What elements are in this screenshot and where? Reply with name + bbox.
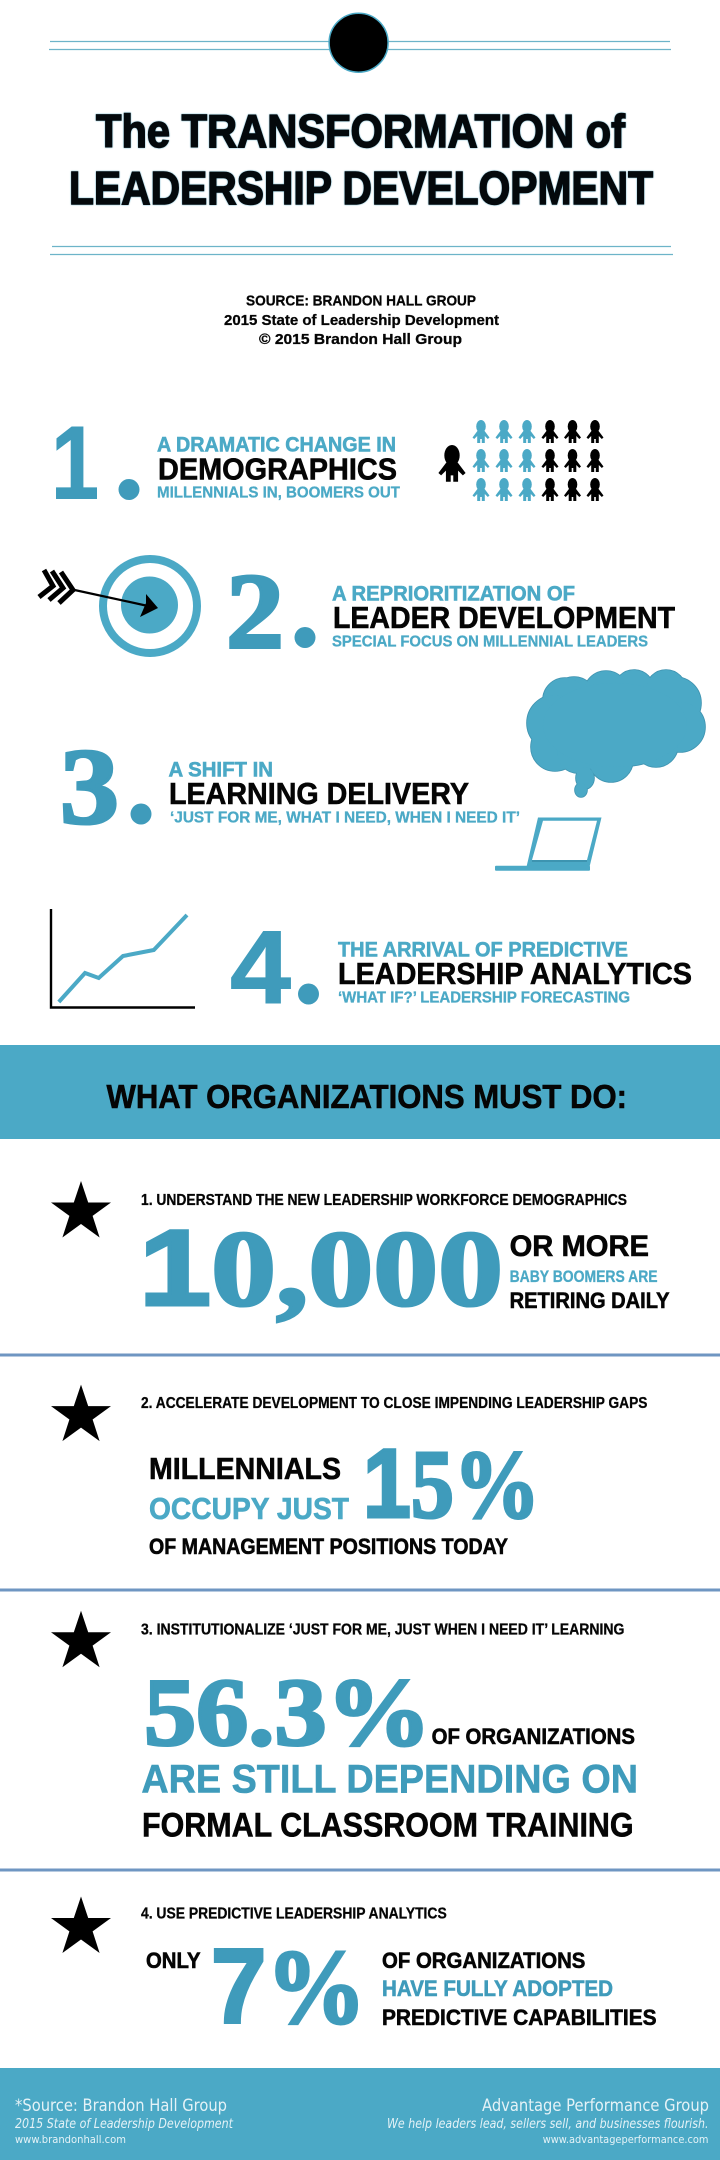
number 4	[230, 910, 319, 1026]
stat caption: PREDICTIVE CAPABILITIES	[382, 2005, 657, 2030]
trend 1 text: MILLENNIALS IN, BOOMERS OUT	[157, 485, 401, 502]
panel: action 1	[51, 1181, 670, 1329]
stat: 7%: 7%	[211, 1928, 366, 2046]
action 1 heading: 1. UNDERSTAND THE NEW LEADERSHIP WORKFORCE DEMOGRAPHICS	[141, 1192, 627, 1209]
trend 3 text: LEARNING DELIVERY	[169, 776, 469, 811]
icon: people grid	[438, 420, 604, 501]
title: LEADERSHIP DEVELOPMENT	[69, 162, 653, 214]
stat caption: RETIRING DAILY	[510, 1288, 670, 1313]
stat caption: ARE STILL DEPENDING ON	[141, 1758, 638, 1802]
stat caption: OF ORGANIZATIONS	[382, 1948, 585, 1973]
footer source credit: www.brandonhall.com	[15, 2133, 126, 2146]
source block: © 2015 Brandon Hall Group	[259, 331, 462, 348]
number 1: 1	[51, 406, 99, 522]
footer source credit: *Source: Brandon Hall Group	[15, 2096, 227, 2116]
panel: action 4	[51, 1896, 657, 2046]
trend 2 text: LEADER DEVELOPMENT	[333, 600, 675, 635]
footer source credit	[15, 2096, 234, 2146]
stat caption: OF ORGANIZATIONS	[432, 1724, 635, 1749]
stat: 10,000: 10,000	[139, 1207, 503, 1329]
trend 4 text	[338, 939, 692, 1007]
icon: line chart	[51, 909, 195, 1008]
trend 2 text: SPECIAL FOCUS ON MILLENNIAL LEADERS	[332, 634, 648, 651]
stat caption: HAVE FULLY ADOPTED	[382, 1976, 613, 2001]
number 2: 2	[226, 553, 284, 672]
trend 1: demographics	[51, 406, 604, 522]
trend 4: predictive analytics	[51, 909, 692, 1026]
stat: 56.3%: 56.3%	[144, 1658, 431, 1766]
icon: star	[51, 1611, 111, 1667]
icon: target and arrow	[39, 559, 197, 653]
trend 2 text: A REPRIORITIZATION OF	[332, 583, 575, 606]
trend 4 text: ‘WHAT IF?’ LEADERSHIP FORECASTING	[338, 990, 630, 1007]
number 4: 4	[230, 910, 291, 1026]
stat caption	[382, 1948, 657, 2030]
stat caption: BABY BOOMERS ARE	[510, 1268, 658, 1286]
stat caption left	[149, 1451, 349, 1526]
icon: star	[51, 1896, 111, 1953]
action 2 heading: 2. ACCELERATE DEVELOPMENT TO CLOSE IMPENDING LEADERSHIP GAPS	[141, 1395, 647, 1412]
icon: star	[51, 1385, 111, 1441]
header ornament: lines and circle	[49, 13, 671, 72]
trend 3 text: ‘JUST FOR ME, WHAT I NEED, WHEN I NEED IT’	[170, 810, 520, 827]
panel: action 3	[51, 1611, 638, 1844]
title	[69, 105, 653, 214]
panel: action 2	[51, 1385, 647, 1559]
stat caption: FORMAL CLASSROOM TRAINING	[142, 1806, 634, 1844]
icon: star	[51, 1181, 111, 1238]
stat caption	[510, 1230, 670, 1313]
trend 1 text	[157, 434, 401, 502]
stat caption left: MILLENNIALS	[149, 1451, 341, 1486]
source block: SOURCE: BRANDON HALL GROUP	[246, 293, 476, 310]
trend 2: leader development	[39, 553, 675, 672]
number 3	[60, 728, 152, 847]
stat caption bottom: OF MANAGEMENT POSITIONS TODAY	[149, 1534, 508, 1559]
trend 1 text: DEMOGRAPHICS	[158, 451, 397, 486]
stat caption: OR MORE	[510, 1230, 649, 1263]
icon: thought cloud	[527, 670, 705, 797]
footer source credit: 2015 State of Leadership Development	[15, 2117, 234, 2132]
stat: 15%: 15%	[363, 1429, 540, 1538]
number 1	[51, 406, 140, 522]
trend 3: learning delivery	[60, 670, 705, 871]
action 3 heading: 3. INSTITUTIONALIZE ‘JUST FOR ME, JUST WHEN I NEED IT’ LEARNING	[141, 1622, 624, 1639]
stat caption	[141, 1724, 638, 1844]
trend 4 text: THE ARRIVAL OF PREDICTIVE	[338, 939, 628, 962]
trend 1 text: A DRAMATIC CHANGE IN	[157, 434, 396, 457]
trend 3 text	[168, 759, 520, 827]
banner: what organizations must do	[0, 1045, 720, 1139]
footer	[0, 2068, 720, 2160]
title bottom double rule	[50, 246, 673, 254]
number 3: 3	[60, 728, 119, 847]
footer company credit	[387, 2096, 709, 2146]
icon: laptop	[495, 818, 602, 871]
stat caption left: OCCUPY JUST	[149, 1491, 349, 1526]
trend 3 text: A SHIFT IN	[168, 759, 273, 782]
action 4 heading: 4. USE PREDICTIVE LEADERSHIP ANALYTICS	[141, 1905, 447, 1922]
banner: what organizations must do: WHAT ORGANIZATIONS MUST DO:	[106, 1078, 627, 1115]
trend 4 text: LEADERSHIP ANALYTICS	[338, 956, 692, 991]
number 2	[226, 553, 316, 672]
label: only: ONLY	[146, 1948, 201, 1973]
source block: 2015 State of Leadership Development	[224, 312, 499, 329]
source block	[224, 293, 499, 348]
title: The TRANSFORMATION of	[96, 105, 626, 157]
trend 2 text	[332, 583, 675, 651]
